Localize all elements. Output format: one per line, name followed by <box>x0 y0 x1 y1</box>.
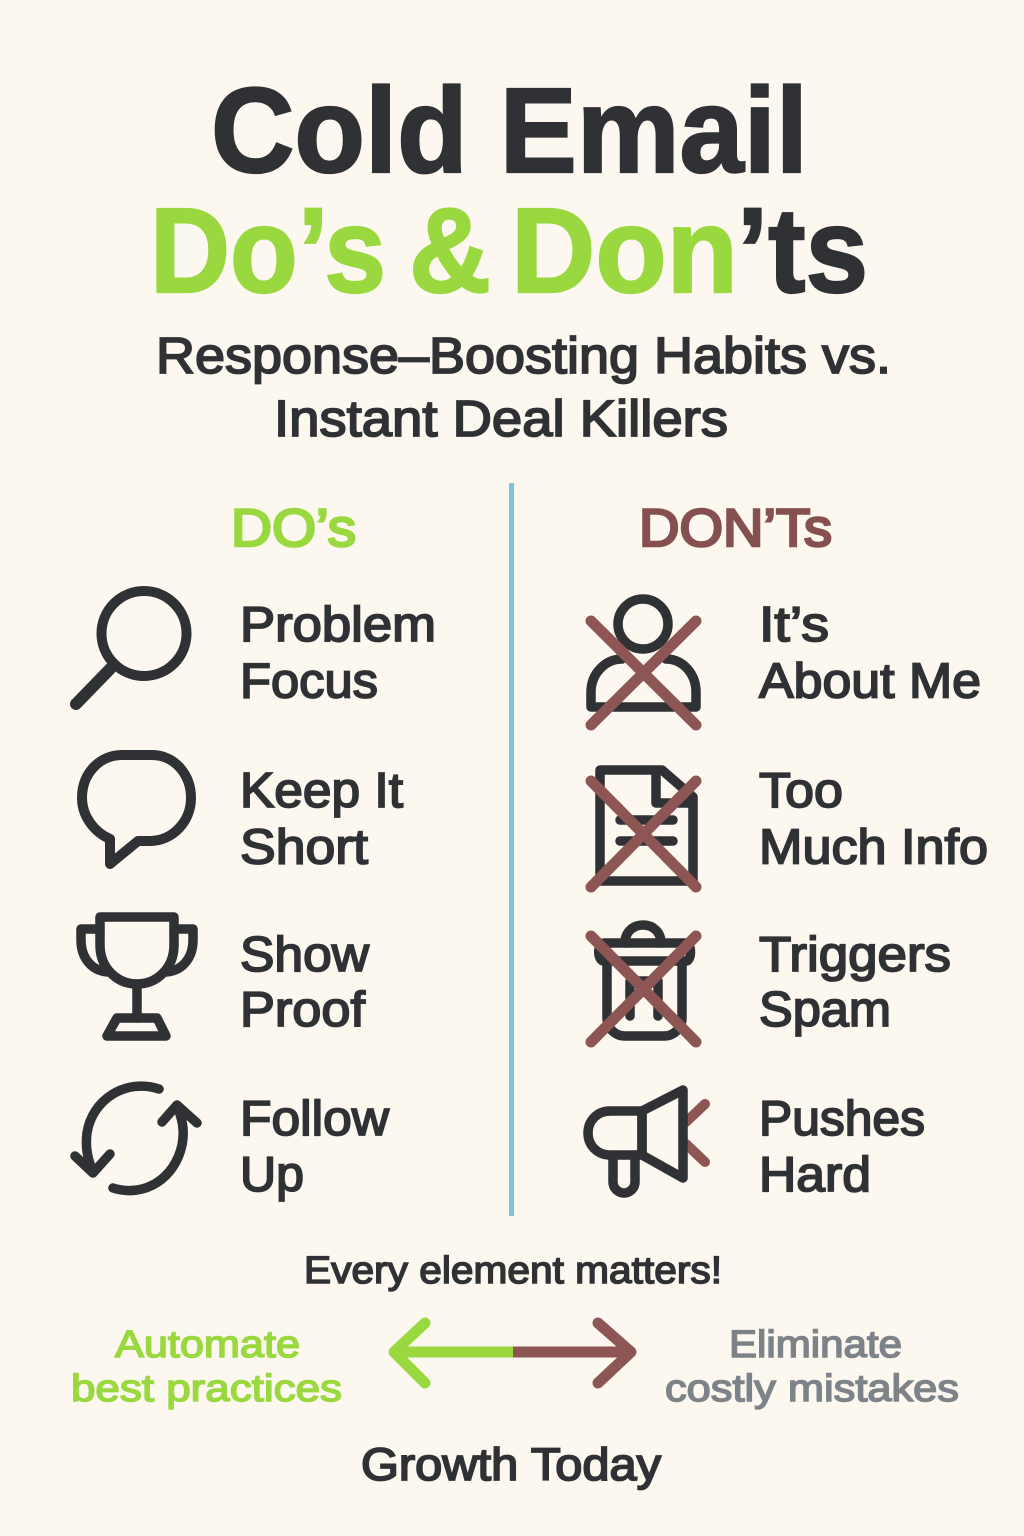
callout: every element matters: Every element matters! <box>304 1250 722 1292</box>
icon: crossed megaphone <box>588 1090 705 1193</box>
label: pushes hard: Hard <box>759 1148 871 1202</box>
label: triggers spam <box>759 928 951 1037</box>
label: problem focus: Focus <box>240 654 378 708</box>
label: keep it short <box>240 764 403 874</box>
label: it's about me: About Me <box>759 654 981 708</box>
label: problem focus: Problem <box>240 598 436 652</box>
icon: speech bubble <box>82 755 191 864</box>
title: Cold Email <box>211 62 808 198</box>
dont item: triggers spam <box>591 925 951 1042</box>
arrow: two-way green to red <box>394 1323 631 1383</box>
footer: growth today: Growth Today <box>361 1439 662 1490</box>
icon: trophy <box>81 917 193 1036</box>
label: problem focus <box>240 598 436 708</box>
title: & <box>409 182 491 318</box>
text: eliminate costly mistakes: Eliminate <box>729 1324 902 1366</box>
title: Don <box>511 182 738 318</box>
label: show proof: Proof <box>240 983 365 1037</box>
text: automate best practices: best practices <box>71 1368 342 1410</box>
text: automate best practices <box>71 1324 342 1410</box>
title <box>150 62 868 318</box>
label: too much info <box>759 764 988 874</box>
icon: crossed trash can <box>591 925 696 1042</box>
do item: follow up <box>75 1086 390 1202</box>
icon: sync arrows <box>75 1086 197 1191</box>
label: keep it short: Keep It <box>240 764 403 818</box>
subtitle <box>156 327 891 447</box>
label: too much info: Too <box>759 764 843 818</box>
label: it's about me: It’s <box>759 598 829 652</box>
label: too much info: Much Info <box>759 820 988 874</box>
label: it's about me <box>759 598 981 708</box>
label: follow up: Follow <box>240 1092 390 1146</box>
do item: problem focus <box>76 591 436 708</box>
icon: crossed document <box>591 770 696 887</box>
do item: show proof <box>81 917 370 1037</box>
subtitle: Response–Boosting Habits vs. <box>156 327 891 384</box>
subtitle: Instant Deal Killers <box>274 390 728 447</box>
label: show proof <box>240 928 370 1037</box>
dont item: it's about me <box>591 598 981 725</box>
label: follow up: Up <box>240 1148 304 1202</box>
label: show proof: Show <box>240 928 370 982</box>
title: Do’s <box>150 182 386 318</box>
label: pushes hard <box>759 1092 925 1202</box>
dont item: too much info <box>591 764 988 887</box>
icon: magnifying glass <box>76 591 186 704</box>
label: pushes hard: Pushes <box>759 1092 925 1146</box>
do item: keep it short <box>82 755 403 874</box>
text: automate best practices: Automate <box>115 1324 300 1366</box>
title: ’ts <box>737 182 868 318</box>
center divider <box>509 483 514 1216</box>
dont item: pushes hard <box>588 1090 925 1202</box>
text: eliminate costly mistakes: costly mistakes <box>665 1368 959 1410</box>
heading: DON'Ts: DON’Ts <box>639 499 832 558</box>
icon: crossed person <box>591 599 696 725</box>
label: triggers spam: Spam <box>759 983 891 1037</box>
label: triggers spam: Triggers <box>759 928 951 982</box>
label: keep it short: Short <box>240 820 368 874</box>
label: follow up <box>240 1092 390 1202</box>
heading: DO's: DO’s <box>231 499 356 558</box>
text: eliminate costly mistakes <box>665 1324 959 1410</box>
